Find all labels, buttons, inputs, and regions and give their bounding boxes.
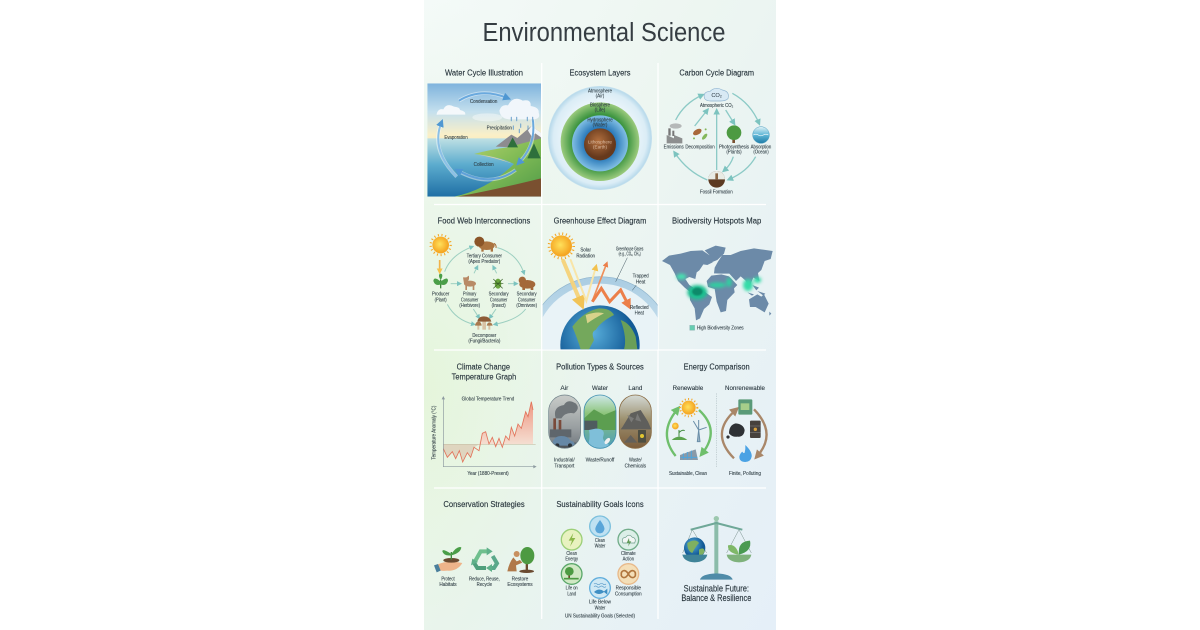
biodiversity hotspots (676, 274, 761, 300)
heading: water cycle: Water Cycle Illustration (445, 68, 523, 78)
icon: life on land: Land (567, 591, 576, 597)
labels: greenhouse: Reflected (630, 305, 649, 311)
continents (662, 246, 773, 320)
rain (511, 117, 533, 133)
icon: small sun and sprout (672, 423, 687, 440)
labels: water cycle: Evaporation (444, 135, 468, 141)
row 4 (434, 499, 751, 619)
labels: greenhouse: Solar (580, 248, 591, 254)
line chart: Year (1880-Present) (467, 471, 509, 477)
icon: fossil formation: Fossil Formation (700, 189, 733, 195)
heading: climate (452, 362, 516, 381)
icon: tree: Photosynthesis (719, 145, 749, 151)
label: secondary consumer insect: (Insect) (492, 303, 506, 309)
icon: clean energy: Energy (565, 557, 578, 563)
icon: lion (474, 237, 496, 252)
heading: conservation: Conservation Strategies (443, 499, 525, 509)
label: decomposer: (Fungi/Bacteria) (468, 339, 501, 345)
icon: coal (726, 423, 745, 439)
concentric layers: (Earth) (593, 145, 607, 151)
leaves (728, 541, 750, 555)
icon: climate action (618, 529, 639, 563)
icon: person planting tree: Restore (512, 576, 528, 582)
icon: clean energy: Clean (566, 551, 577, 557)
icon: ocean: (Ocean) (753, 150, 769, 156)
icon: climate action: Climate (621, 551, 636, 557)
caption: sustainable future: Sustainable Future: (684, 584, 749, 594)
nonrenewable column: Finite, Polluting (729, 471, 761, 477)
concentric layers (548, 86, 652, 190)
row 2 (430, 217, 773, 350)
label: secondary consumer omnivore: Secondary (517, 292, 537, 298)
icon: clean water (590, 516, 610, 550)
icon: life below water (589, 578, 611, 611)
heading: energy: Energy Comparison (684, 362, 750, 372)
heading: climate: Climate Change (457, 362, 510, 372)
label: producer: (Plant) (435, 297, 447, 303)
goals caption: UN Sustainability Goals (Selected) (565, 613, 635, 619)
capsule: land: Chemicals (625, 463, 646, 469)
icon: deer (463, 276, 476, 290)
title: Environmental Science (482, 19, 726, 47)
labels: water cycle: Collection (474, 162, 494, 168)
panel: conservation (434, 499, 534, 588)
labels: greenhouse: (e.g., CO₂, CH₄) (619, 252, 641, 258)
cloud: right (499, 99, 539, 119)
icon: climate action: Action (623, 557, 634, 563)
icon: gas canister (738, 399, 752, 415)
icon: insect (493, 279, 503, 289)
concentric layers: (Water) (593, 122, 608, 128)
label: tertiary consumer (467, 253, 502, 265)
label: secondary consumer insect (489, 292, 509, 309)
label: secondary consumer omnivore: (Omnivore) (516, 303, 537, 309)
icon: balance scale (682, 516, 751, 580)
world map (662, 246, 773, 320)
labels: greenhouse: Heat (635, 311, 644, 317)
label: secondary consumer insect: Secondary (489, 292, 509, 298)
icon: sun (431, 235, 451, 271)
capsule: water (584, 385, 616, 464)
concentric layers: (Air) (596, 94, 605, 100)
caption: sustainable future (681, 584, 751, 603)
globe (684, 537, 705, 559)
legend: High Biodiversity Zones (697, 326, 744, 332)
capsule: air (549, 385, 581, 469)
icon: bear (519, 277, 535, 290)
capsule: land: Waste/ (629, 458, 642, 464)
icon: tree (719, 125, 749, 156)
concentric layers: Atmosphere (588, 89, 612, 95)
concentric layers: Lithosphere (588, 140, 612, 146)
panel: ecosystem layers (548, 68, 652, 190)
icon: oil barrel (750, 421, 761, 438)
icon: CO2 cloud (700, 88, 733, 109)
icon: hand with plant: Protect (441, 576, 455, 582)
nonrenewable arrows (722, 409, 767, 458)
label: producer (432, 292, 450, 303)
icon: person planting tree: Ecosystems (507, 582, 533, 588)
icon: clean energy (561, 529, 582, 563)
capsule: air: Industrial/ (554, 458, 575, 464)
icon: responsible consumption: Consumption (615, 591, 642, 597)
labels: water cycle: Precipitation (487, 126, 512, 132)
background panel (424, 0, 776, 630)
icon: ocean: Absorption (751, 145, 771, 151)
capsule: water: Waste/Runoff (586, 458, 615, 464)
panel: biodiversity map (662, 216, 773, 332)
capsule: land: Land (628, 385, 643, 392)
icon: sun (680, 399, 697, 416)
row 1 (427, 68, 771, 197)
renewable column (667, 385, 711, 477)
heading: climate: Temperature Graph (452, 371, 516, 381)
icon: recycle: Recycle (477, 582, 492, 588)
labels: greenhouse: Heat (636, 279, 646, 285)
label: decomposer: Decomposer (472, 333, 497, 339)
label: secondary consumer omnivore (516, 292, 537, 309)
nonrenewable column: Nonrenewable (725, 385, 765, 392)
panel: sustainability goals (556, 499, 644, 619)
label: secondary consumer insect: Consumer (490, 297, 508, 303)
icon: responsible consumption (615, 564, 642, 597)
panel: pollution (549, 362, 651, 469)
panel: energy comparison (667, 362, 767, 477)
heading: ecosystem: Ecosystem Layers (569, 68, 631, 78)
icon: life on land: Life on (566, 586, 578, 592)
icon: wind turbine (693, 420, 707, 442)
capsule: air: Air (560, 385, 569, 392)
labels: greenhouse: Radiation (576, 253, 595, 259)
capsule: land (619, 385, 651, 469)
line chart: Temperature Anomaly (°C) (431, 405, 437, 460)
icon: recycle: Reduce, Reuse, (469, 576, 500, 582)
icon: mushrooms (475, 316, 493, 330)
food web arrows (445, 247, 526, 324)
line chart: Global Temperature Trend (462, 397, 514, 403)
panel: greenhouse effect (527, 216, 673, 422)
heading: biodiversity: Biodiversity Hotspots Map (672, 216, 761, 226)
icon: sun (549, 234, 574, 258)
icon: clean water: Clean (595, 538, 605, 544)
concentric layers: (Life) (595, 108, 606, 114)
cloud: left (437, 105, 465, 115)
icon: plant (433, 274, 448, 288)
icon: CO2 cloud: CO₂ (711, 93, 722, 99)
labels: water cycle: Condensation (470, 99, 497, 105)
panel: climate graph (431, 362, 537, 477)
concentric layers: Hydrosphere (587, 117, 613, 123)
capsule: air: Transport (554, 463, 575, 469)
label: producer: Producer (432, 292, 450, 298)
line chart (431, 396, 537, 477)
icon: responsible consumption: Responsible (616, 586, 641, 592)
panel: carbon cycle (664, 68, 771, 195)
icon: hydro dam (680, 449, 698, 460)
row 3 (431, 362, 767, 477)
panel: water cycle (427, 68, 541, 197)
icon: tree: (Plants) (726, 150, 742, 156)
heading: carbon cycle: Carbon Cycle Diagram (679, 68, 754, 78)
heading: food web: Food Web Interconnections (438, 216, 531, 226)
concentric layers: Biosphere (590, 103, 610, 109)
icon: CO2 cloud: Atmospheric CO₂ (700, 103, 733, 109)
icon: life below water: Life Below (589, 600, 611, 606)
heading: goals: Sustainability Goals Icons (556, 499, 644, 509)
heading: pollution: Pollution Types & Sources (556, 362, 644, 372)
label: primary consumer: Primary (463, 292, 477, 298)
icon: ocean (751, 127, 771, 156)
icon: flame (739, 445, 752, 462)
label: primary consumer: Consumer (461, 297, 479, 303)
icon: life below water: Water (595, 605, 606, 611)
panel: sustainable future (681, 516, 751, 603)
water cycle scene (427, 83, 541, 197)
caption: sustainable future: Balance & Resilience (681, 593, 751, 603)
icon: clean water: Water (595, 544, 606, 550)
labels: greenhouse: Greenhouse Gases (616, 246, 644, 252)
greenhouse scene (542, 276, 658, 350)
labels: greenhouse: Trapped (633, 274, 649, 280)
renewable column: Renewable (673, 385, 704, 392)
label: primary consumer (459, 292, 480, 309)
solar arrows (563, 260, 628, 304)
heading: greenhouse: Greenhouse Effect Diagram (554, 216, 646, 226)
icon: hand with plant: Habitats (439, 582, 457, 588)
label: decomposer (468, 333, 501, 345)
renewable column: Sustainable, Clean (669, 471, 707, 477)
renewable arrows (667, 409, 711, 456)
icon: factory: Emissions (664, 145, 684, 151)
carbon arrows (675, 93, 759, 180)
icon: hand with plant (434, 547, 462, 588)
panel: food web (431, 216, 537, 345)
labels: greenhouse (576, 246, 649, 317)
label: tertiary consumer: Tertiary Consumer (467, 253, 502, 259)
label: secondary consumer omnivore: Consumer (518, 297, 536, 303)
icon: recycle (469, 547, 500, 588)
icon: person planting tree (507, 547, 534, 588)
nonrenewable column (717, 385, 767, 477)
label: tertiary consumer: (Apex Predator) (468, 259, 501, 265)
capsule: water: Water (592, 385, 609, 392)
labels: water cycle (444, 99, 512, 168)
icon: life on land (561, 564, 582, 597)
icon: decomposition: Decomposition (685, 145, 715, 151)
label: primary consumer: (Herbivore) (459, 303, 480, 309)
